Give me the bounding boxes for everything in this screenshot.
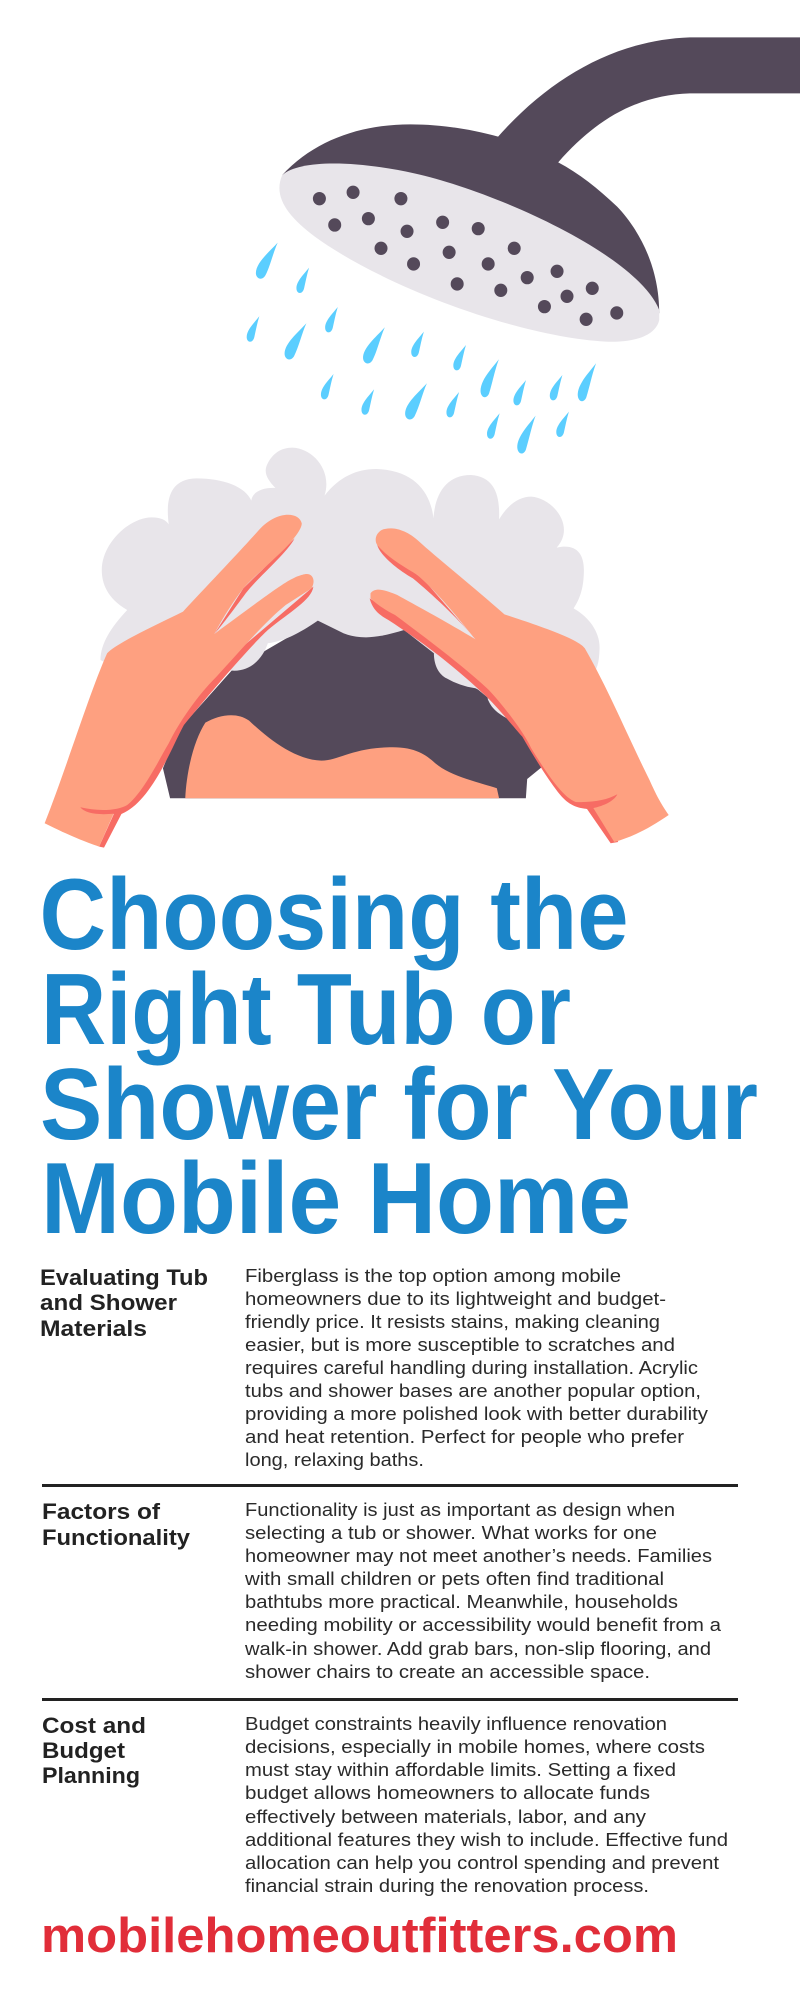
right hand shadow — [370, 545, 618, 843]
section: cost and budget planning — [42, 1713, 728, 1896]
heading: budget: Planning — [42, 1763, 140, 1788]
illustration: shower washing hair — [45, 37, 800, 848]
text block: functionality: homeowner may not meet another’s needs. Families — [245, 1545, 712, 1566]
right hand — [370, 528, 669, 843]
soap foam — [100, 448, 600, 692]
water drops — [247, 243, 596, 454]
text block: materials — [245, 1265, 709, 1470]
heading: budget: Cost and — [42, 1713, 146, 1738]
text block: materials: long, relaxing baths. — [245, 1449, 424, 1470]
text block: functionality: Functionality is just as important as design when — [245, 1499, 675, 1520]
title: Mobile Home — [41, 1143, 631, 1255]
text block: budget — [245, 1713, 728, 1896]
heading: materials: Evaluating Tub — [40, 1265, 208, 1290]
shower nozzle holes — [313, 186, 623, 326]
text block: materials: requires careful handling during installation. Acrylic — [245, 1357, 698, 1378]
section: factors of functionality — [42, 1499, 722, 1682]
hair — [163, 620, 542, 798]
heading: functionality: Factors of — [42, 1499, 161, 1524]
heading: functionality: Functionality — [42, 1525, 191, 1550]
text block: materials: easier, but is more susceptible to scratches and — [245, 1334, 675, 1355]
heading: budget: Budget — [42, 1738, 126, 1763]
shower face — [279, 164, 659, 342]
text block: functionality: shower chairs to create an accessible space. — [245, 1661, 650, 1682]
heading: materials — [40, 1265, 208, 1341]
text block: functionality: needing mobility or accessibility would benefit from a — [245, 1614, 722, 1635]
text block: functionality: selecting a tub or shower. What works for one — [245, 1522, 657, 1543]
text block: materials: homeowners due to its lightweight and budget- — [245, 1288, 666, 1309]
text block: functionality — [244, 1499, 722, 1682]
text block: materials: Fiberglass is the top option among mobile — [245, 1265, 621, 1286]
heading: materials: and Shower — [40, 1290, 177, 1315]
text block: functionality: bathtubs more practical. Meanwhile, households — [245, 1591, 678, 1612]
text block: budget: must stay within affordable limits. Setting a fixed — [245, 1759, 676, 1780]
text block: materials: providing a more polished look with better durability — [245, 1403, 709, 1424]
text block: functionality: with small children or pets often find traditional — [244, 1568, 664, 1589]
heading: materials: Materials — [40, 1316, 147, 1341]
icon: head with foam and hands — [45, 448, 669, 848]
heading: functionality — [42, 1499, 191, 1550]
section: evaluating tub and shower materials — [40, 1265, 709, 1470]
website url: mobilehomeoutfitters.com — [41, 1909, 678, 1963]
text block: budget: Budget constraints heavily influence renovation — [245, 1713, 667, 1734]
left hand shadow — [80, 538, 313, 848]
heading: budget — [42, 1713, 146, 1788]
text block: materials: friendly price. It resists stains, making cleaning — [245, 1311, 660, 1332]
text block: functionality: walk-in shower. Add grab bars, non-slip flooring, and — [244, 1638, 711, 1659]
shower arm and head shell — [282, 37, 800, 313]
face — [185, 715, 499, 798]
text block: budget: additional features they wish to include. Effective fund — [245, 1829, 728, 1850]
text block: budget: effectively between materials, labor, and any — [245, 1806, 647, 1827]
right wrist crease — [576, 794, 617, 809]
title: Right Tub or — [41, 954, 571, 1066]
right hand palm and fingers — [371, 528, 669, 842]
icon: shower head — [247, 37, 800, 454]
left hand — [45, 515, 314, 848]
title: Choosing the — [40, 859, 628, 971]
left hand palm and fingers — [45, 515, 314, 847]
text block: materials: tubs and shower bases are another popular option, — [245, 1380, 701, 1401]
text block: budget: allocation can help you control spending and prevent — [245, 1852, 719, 1873]
title: Shower for Your — [40, 1049, 758, 1161]
text block: budget: decisions, especially in mobile homes, where costs — [245, 1736, 705, 1757]
left wrist crease — [80, 805, 127, 814]
text block: materials: and heat retention. Perfect for people who prefer — [245, 1426, 684, 1447]
text block: budget: financial strain during the renovation process. — [245, 1875, 649, 1896]
title — [40, 859, 758, 1255]
foam patch by ear — [487, 698, 509, 718]
text block: budget: budget allows homeowners to allocate funds — [245, 1782, 650, 1803]
